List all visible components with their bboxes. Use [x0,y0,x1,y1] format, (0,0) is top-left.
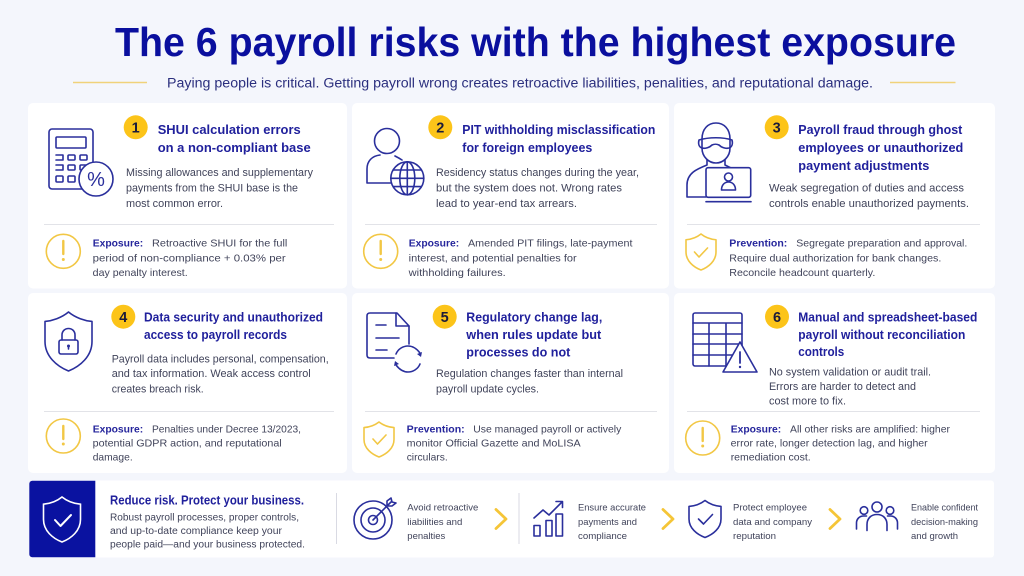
icon: exposure warning 4 [46,419,80,453]
icon: exposure warning 1 [46,234,80,268]
exposure text 4: potential GDPR action, and reputational [93,438,282,450]
number badge 2: 2 [436,120,444,136]
benefit: protect data: data and company [733,517,812,528]
icon: calculator with percent [49,129,113,196]
heading 5: when rules update but [465,327,602,342]
exposure text 6: Exposure: [731,423,781,435]
exposure text 1: Retroactive SHUI for the full [152,238,287,250]
banner heading and text: and up-to-date compliance keep your [110,526,283,537]
arrow: chevron 1 [496,510,506,528]
heading 1 [158,122,311,155]
prevention text 5: circulars. [407,452,448,464]
exposure text 1 [93,238,287,279]
exposure text 4 [93,423,301,464]
description 4: and tax information. Weak access control [112,368,311,380]
benefit: avoid liabilities: liabilities and [407,517,462,528]
description 6: cost more to fix. [769,396,846,408]
exposure text 1: Exposure: [93,238,143,250]
description 1: Missing allowances and supplementary [126,167,313,179]
benefit: avoid liabilities: penalties [407,531,446,542]
description 5: Regulation changes faster than internal [436,368,623,380]
icon: calculator with percent: % [87,169,105,191]
benefit: confident decisions: Enable confident [911,503,978,514]
prevention text 3: Reconcile headcount quarterly. [729,267,875,279]
icon: bar chart with rising arrow [534,502,562,536]
benefit: protect data [733,503,812,542]
description 4: Payroll data includes personal, compensation, [112,353,329,365]
banner heading and text: Reduce risk. Protect your business. [110,493,304,507]
heading 4 [144,309,323,342]
panel: risk 6 manual spreadsheet payroll [674,293,995,473]
benefit: confident decisions: and growth [911,531,958,542]
number badge 4: 4 [119,310,127,326]
number badge 5 [433,305,457,329]
heading 3: payment adjustments [798,158,929,173]
icon: spreadsheet with warning triangle [693,313,757,372]
description 1: most common error. [126,198,223,210]
exposure text 2: Exposure: [409,238,459,250]
icon: shield with padlock [45,312,92,371]
icon: person with globe [367,128,424,195]
arrow: chevron 3 [830,510,840,528]
heading 3: Payroll fraud through ghost [798,122,963,137]
benefit: protect data: reputation [733,531,776,542]
benefit: confident decisions [911,503,978,542]
panel: risk 2 PIT withholding misclassification [352,103,669,288]
heading 5: processes do not [466,344,571,359]
exposure text 4: damage. [93,452,133,464]
description 1 [126,167,313,210]
description 3: controls enable unauthorized payments. [769,198,969,210]
exposure text 2: interest, and potential penalties for [409,253,577,265]
number badge 5: 5 [441,310,449,326]
icon: target with arrow [354,498,396,539]
arrow: chevron 2 [663,510,673,528]
benefit: accurate payments: payments and [578,517,637,528]
icon: masked person at laptop [687,123,751,202]
panel: risk 5 regulatory change lag [352,293,669,473]
panel: risk 3 payroll fraud [674,103,995,288]
prevention text 5 [407,423,622,464]
prevention text 3 [729,238,967,279]
heading 6: Manual and spreadsheet-based [798,309,977,324]
description 2 [436,167,639,210]
benefit: avoid liabilities [407,503,478,542]
number badge 3: 3 [773,120,781,136]
icon: document with refresh arrows [367,313,422,372]
heading 6 [798,309,977,359]
benefit: accurate payments [578,503,646,542]
icon: white shield on blue tile [29,481,95,557]
heading 6: payroll without reconciliation [798,327,965,342]
description 5: payroll update cycles. [436,383,539,395]
description 1: payments from the SHUI base is the [126,182,298,194]
number badge 1: 1 [132,120,140,136]
prevention text 3: Prevention: [729,238,787,250]
banner heading and text: Robust payroll processes, proper controls, [110,513,299,524]
benefit: avoid liabilities: Avoid retroactive [407,503,478,514]
prevention text 3: Segregate preparation and approval. [796,238,967,250]
benefit: protect data: Protect employee [733,503,807,514]
number badge 3 [765,115,789,139]
exposure text 1: period of non-compliance + 0.03% per [93,253,286,265]
heading 2: for foreign employees [462,140,592,155]
heading 2: PIT withholding misclassification [462,122,655,137]
description 4 [112,353,329,395]
title: The 6 payroll risks with the highest exposure [115,19,956,65]
heading 6: controls [798,344,844,359]
icon: prevention shield 3 [686,234,716,270]
prevention text 5: Use managed payroll or actively [473,423,622,435]
icon: exposure warning 2 [364,234,398,268]
icon: shield with check [689,500,721,538]
description 2: but the system does not. Wrong rates [436,182,622,194]
exposure text 2: Amended PIT filings, late-payment [468,238,633,250]
description 4: creates breach risk. [112,383,204,395]
icon: exposure warning 6 [686,421,720,455]
exposure text 6: All other risks are amplified: higher [790,423,950,435]
exposure text 6: remediation cost. [731,452,811,464]
heading 3: employees or unauthorized [798,140,963,155]
panel: bottom summary banner [29,480,994,558]
exposure text 6 [731,423,950,464]
heading 2 [462,122,655,155]
exposure text 2: withholding failures. [408,267,506,279]
exposure text 2 [408,238,633,279]
description 6: No system validation or audit trail. [769,366,931,378]
heading 1: on a non-compliant base [158,140,311,155]
number badge 4 [111,305,135,329]
panel: risk 1 SHUI calculation errors [28,103,347,288]
heading 1: SHUI calculation errors [158,122,301,137]
description 6: Errors are harder to detect and [769,381,916,393]
prevention text 3: Require dual authorization for bank changes. [729,253,941,265]
heading 5 [465,309,602,359]
heading 4: Data security and unauthorized [144,309,323,324]
subtitle: Paying people is critical. Getting payroll wrong creates retroactive liabilities, penalities, and reputational damage. [167,76,873,90]
number badge 1 [124,115,148,139]
description 5 [436,368,623,395]
description 2: lead to year-end tax arrears. [436,198,577,210]
benefit: accurate payments: compliance [578,531,627,542]
prevention text 5: monitor Official Gazette and MoLISA [407,438,581,450]
benefit: accurate payments: Ensure accurate [578,503,646,514]
description 2: Residency status changes during the year, [436,167,639,179]
exposure text 6: error rate, longer detection lag, and higher [731,438,928,450]
exposure text 1: day penalty interest. [93,267,188,279]
panel: risk 4 data security [28,293,347,473]
icon: prevention shield 5 [364,422,394,457]
heading 3 [798,122,963,173]
description 3 [769,182,969,210]
icon: three people [856,502,898,530]
heading 5: Regulatory change lag, [466,309,602,324]
banner heading and text [110,493,305,550]
description 6 [769,366,931,408]
description 3: Weak segregation of duties and access [769,182,964,194]
number badge 6 [765,305,789,329]
number badge 6: 6 [773,310,781,326]
heading 4: access to payroll records [144,327,287,342]
benefit: confident decisions: decision-making [911,517,978,528]
exposure text 4: Penalties under Decree 13/2023, [152,423,301,435]
prevention text 5: Prevention: [407,423,465,435]
banner heading and text: people paid—and your business protected. [110,539,305,550]
number badge 2 [428,115,452,139]
exposure text 4: Exposure: [93,423,143,435]
